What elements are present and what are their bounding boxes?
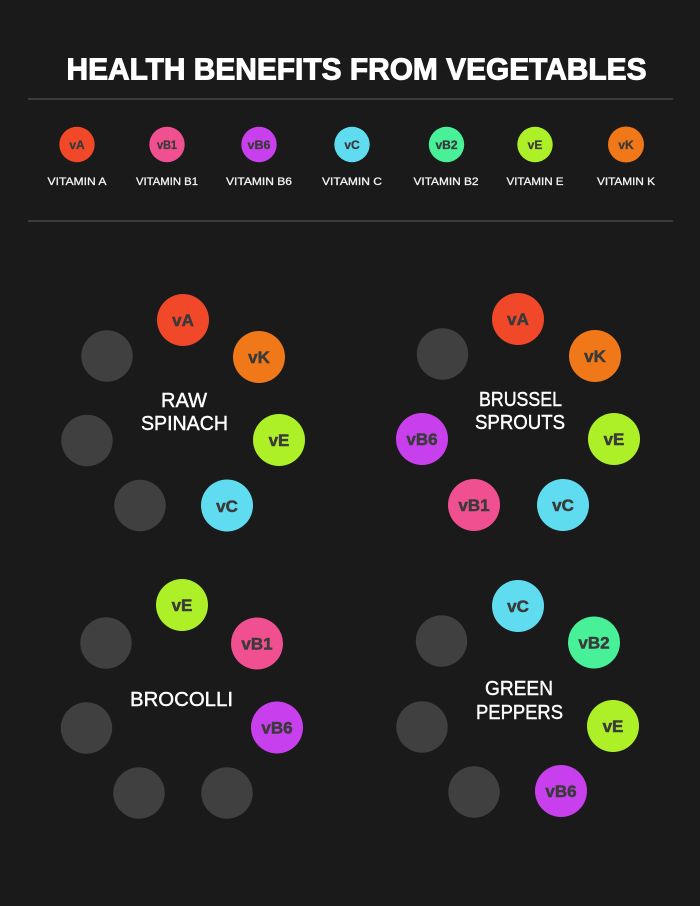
vitamin E badge: vE — [603, 717, 623, 736]
legend item: vitamin B2: vB2 — [436, 138, 458, 152]
vitamin A badge: vA — [507, 310, 529, 329]
vitamin A badge — [157, 294, 209, 346]
legend item: vitamin C: VITAMIN C — [322, 176, 382, 188]
legend item: vitamin E: VITAMIN E — [506, 176, 564, 188]
label: brussel sprouts: SPROUTS — [475, 412, 565, 434]
legend item: vitamin C — [322, 127, 382, 188]
empty slots — [396, 615, 500, 818]
vitamin B1 badge: vB1 — [241, 634, 273, 654]
legend item: vitamin B2 — [414, 127, 478, 188]
label: brussel sprouts: BRUSSEL — [479, 389, 562, 411]
vitamin B1 badge: vB1 — [458, 496, 490, 515]
vitamin E badge: vE — [269, 431, 289, 450]
vitamin E badge — [587, 700, 639, 752]
label: raw spinach: SPINACH — [141, 413, 228, 435]
legend item: vitamin E — [506, 127, 564, 188]
vitamin C badge: vC — [507, 597, 529, 616]
vitamin C badge: vC — [552, 496, 574, 515]
legend item: vitamin A: VITAMIN A — [48, 176, 107, 188]
vitamin C badge — [537, 479, 589, 531]
legend item: vitamin K — [597, 126, 656, 188]
title: HEALTH BENEFITS FROM VEGETABLES — [66, 52, 646, 86]
vitamin C badge — [201, 480, 253, 532]
vitamin B6 badge: vB6 — [406, 430, 438, 449]
label: raw spinach: RAW — [161, 390, 207, 412]
panel: raw spinach — [61, 294, 305, 532]
legend item: vitamin B2: VITAMIN B2 — [414, 176, 478, 188]
legend item: vitamin E: vE — [528, 138, 542, 152]
legend item: vitamin B6 — [226, 127, 292, 188]
vitamin B1 badge — [448, 479, 500, 531]
legend item: vitamin B1: VITAMIN B1 — [136, 176, 198, 188]
vitamin B2 badge: vB2 — [578, 634, 610, 652]
label: green peppers — [476, 678, 563, 724]
vitamin E badge — [156, 579, 208, 631]
empty slot — [417, 328, 468, 380]
legend item: vitamin K: vK — [618, 138, 634, 152]
empty slots — [61, 617, 253, 819]
vitamin C badge — [492, 580, 544, 632]
vitamin B6 badge: vB6 — [261, 718, 293, 738]
vitamin E badge — [588, 413, 640, 465]
vitamin C badge: vC — [216, 497, 238, 516]
legend item: vitamin C: vC — [344, 138, 360, 152]
legend item: vitamin A: vA — [69, 138, 85, 152]
panel: brocolli — [61, 579, 303, 819]
label: green peppers: GREEN — [485, 678, 553, 700]
label: brussel sprouts — [475, 389, 565, 434]
legend item: vitamin B1: vB1 — [157, 138, 177, 152]
vitamin K badge: vK — [584, 347, 607, 366]
vitamin E badge: vE — [604, 430, 624, 449]
legend item: vitamin K: VITAMIN K — [597, 176, 656, 188]
panel: brussel sprouts — [396, 293, 640, 531]
label: green peppers: PEPPERS — [476, 702, 563, 724]
vitamin B6 badge — [396, 413, 448, 465]
panel: green peppers — [396, 580, 639, 818]
vitamin K badge: vK — [248, 348, 271, 367]
vitamin B1 badge — [231, 618, 283, 670]
empty slots — [61, 330, 166, 531]
vitamin E badge: vE — [172, 596, 192, 615]
legend item: vitamin B6: vB6 — [248, 138, 271, 152]
legend item: vitamin A — [48, 127, 107, 188]
vitamin B6 badge — [251, 702, 303, 754]
vitamin K badge — [569, 330, 621, 382]
legend item: vitamin B6: VITAMIN B6 — [226, 176, 292, 188]
vitamin A badge — [492, 293, 544, 345]
legend item: vitamin B1 — [136, 127, 198, 188]
label: raw spinach — [141, 390, 228, 435]
label: brocolli: BROCOLLI — [130, 689, 233, 711]
vitamin E badge — [253, 414, 305, 466]
vitamin B2 badge — [568, 616, 620, 668]
vitamin B6 badge: vB6 — [545, 782, 577, 801]
vitamin K badge — [233, 331, 285, 383]
vitamin A badge: vA — [172, 311, 194, 330]
legend — [48, 126, 656, 188]
vitamin B6 badge — [535, 765, 587, 817]
